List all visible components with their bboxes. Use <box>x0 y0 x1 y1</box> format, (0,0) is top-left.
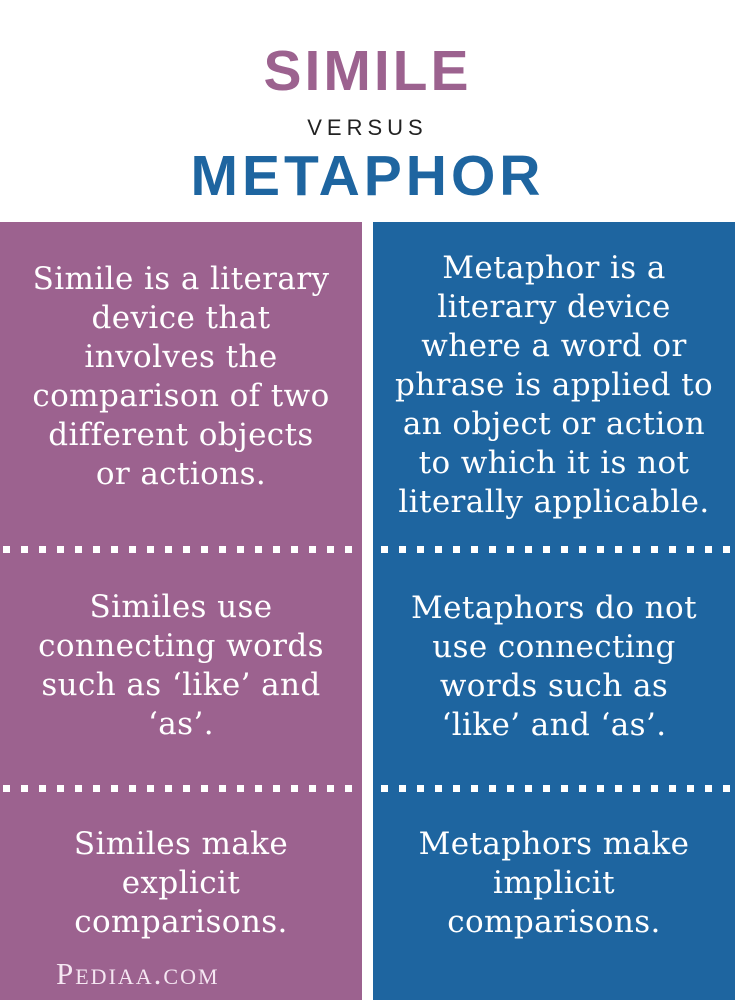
text: metaphor implicit: implicit <box>493 865 615 901</box>
panel: metaphor <box>373 222 735 1000</box>
text: simile definition: comparison of two <box>32 378 330 414</box>
text: simile connecting words: ‘as’. <box>148 706 214 742</box>
text: metaphor connecting words: ‘like’ and ‘as’. <box>441 707 667 743</box>
text: simile definition <box>32 261 330 492</box>
text: simile definition: different objects <box>48 417 314 453</box>
text: metaphor definition: an object or action <box>403 406 705 442</box>
text: simile explicit: comparisons. <box>74 904 288 940</box>
text: metaphor definition: phrase is applied to <box>395 367 713 403</box>
text: metaphor connecting words: use connecting <box>432 629 676 665</box>
text: simile explicit <box>74 826 288 940</box>
panel: simile <box>0 222 362 1000</box>
text: metaphor definition: where a word or <box>421 328 687 364</box>
text: simile connecting words: connecting words <box>38 628 324 664</box>
text: metaphor definition <box>395 250 713 520</box>
text: simile explicit: explicit <box>122 865 240 901</box>
text: metaphor definition: to which it is not <box>419 445 689 481</box>
text: simile explicit: Similes make <box>74 826 288 862</box>
text: metaphor implicit: Metaphors make <box>419 826 689 862</box>
text: metaphor connecting words: words such as <box>440 668 668 704</box>
title: versus: VERSUS <box>307 115 428 140</box>
text: metaphor definition: literary device <box>437 289 671 325</box>
title: simile: SIMILE <box>263 39 472 103</box>
text: simile definition: Simile is a literary <box>33 261 329 297</box>
text: metaphor definition: Metaphor is a <box>442 250 666 286</box>
text: metaphor definition: literally applicable. <box>398 484 710 520</box>
text: simile connecting words: such as ‘like’ and <box>41 667 321 703</box>
text: simile definition: device that <box>92 300 270 336</box>
title: metaphor: METAPHOR <box>191 144 544 208</box>
text: metaphor implicit: comparisons. <box>447 904 661 940</box>
text: metaphor implicit <box>419 826 689 940</box>
text: simile definition: or actions. <box>96 456 266 492</box>
text: simile definition: involves the <box>84 339 278 375</box>
text: metaphor connecting words: Metaphors do not <box>411 590 697 626</box>
logo: pediaa: Pediaa.com <box>56 956 220 991</box>
text: simile connecting words <box>38 589 324 742</box>
text: simile connecting words: Similes use <box>89 589 273 625</box>
text: metaphor connecting words <box>411 590 697 743</box>
